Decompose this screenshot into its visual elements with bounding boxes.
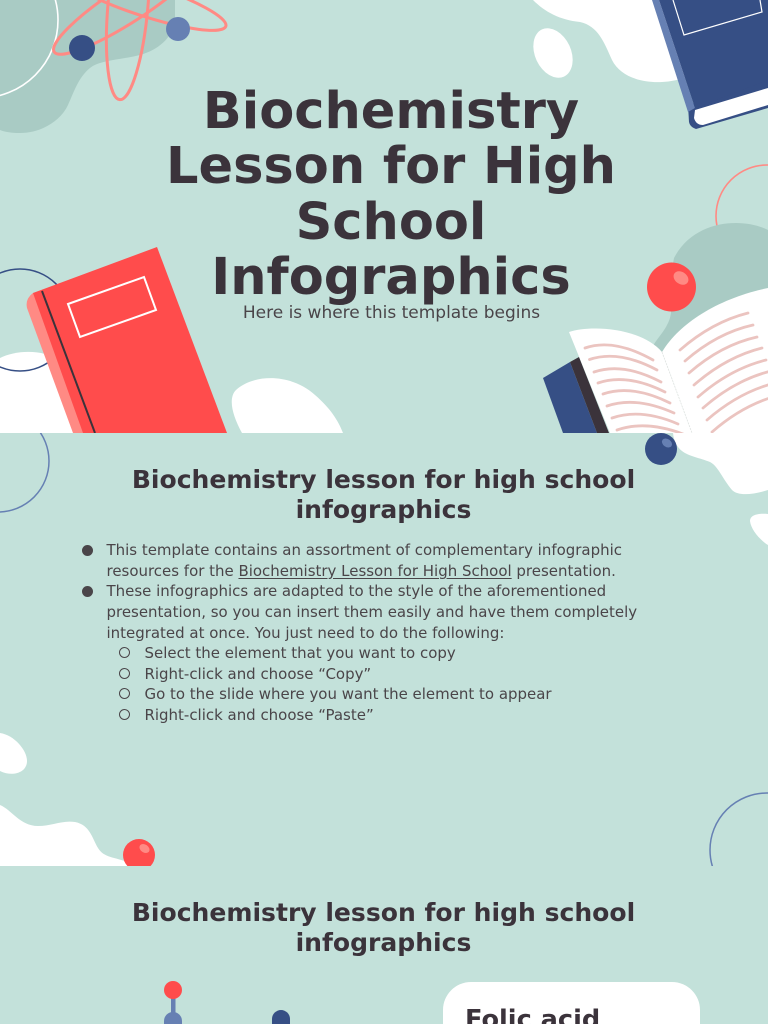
blob: right darker [654,223,768,352]
slide 3 heading [132,898,635,956]
title: Biochemistry [203,82,579,141]
icon: red ball [123,839,155,866]
icon: red book [27,247,227,433]
circle outline: white [0,0,58,98]
sub bullet 4 [119,709,130,720]
subtitle: Here is where this template begins [243,303,540,323]
bullet list: This template contains an assortment of complementary infographic [106,540,622,558]
blob: top right white [673,433,768,494]
bullet list: Select the element that you want to copy [144,644,456,662]
circle outline: salmon [715,164,768,226]
bullet list: Go to the slide where you want the element to appear [144,685,552,703]
blob: top right white [533,0,700,82]
bullet list: integrated at once. You just need to do the following: [106,624,504,642]
bullet list: resources for the Biochemistry Lesson for High School presentation. [106,562,616,580]
blob: bottom left white [0,352,75,433]
bullet 1 marker [82,545,93,556]
icon: blue book [652,0,768,129]
bullet list: presentation, so you can insert them easily and have them completely [106,602,637,620]
sub bullet 2 [119,668,130,679]
title [166,82,616,306]
circle outline: bottom right blue [709,792,768,866]
title: Infographics [211,248,571,306]
slide 3 background [0,866,768,1024]
circle outline: navy [0,268,57,372]
bullet list: These infographics are adapted to the style of the aforementioned [106,582,606,600]
slide 3 heading: Biochemistry lesson for high school [132,898,635,926]
title: Lesson for High [166,137,616,196]
slide 2 heading: infographics [296,494,471,524]
bullet list: Right-click and choose “Paste” [144,706,374,724]
title: School [296,192,486,252]
slide 2 artwork [0,433,768,866]
slide 1 artwork [0,0,768,434]
icon: navy ball [645,433,677,465]
bullet list: Right-click and choose “Copy” [144,664,371,682]
blob: left edge white [0,733,27,774]
slide 2 heading: Biochemistry lesson for high school [132,464,635,494]
slide 2 heading [132,464,635,524]
icon: red ball [647,262,696,312]
blob: right edge white [750,514,768,545]
molecule diagram [164,981,290,1024]
blob: small white oval [533,28,573,78]
slide 2 background [0,433,768,866]
blob: bottom center white [232,378,343,433]
sub bullet 3 [119,688,130,699]
bullet list [82,540,637,724]
card: folic acid [443,982,700,1024]
slide 3 artwork [0,866,768,1024]
circle outline: top left blue [0,433,50,513]
sub bullet 1 [119,647,130,658]
blob: bottom left white [0,805,130,866]
bullet 2 marker [82,586,93,597]
blob: top left [0,0,175,133]
icon: open book [543,288,768,434]
slide 3 heading: infographics [296,928,471,956]
icon: atom [44,0,231,101]
